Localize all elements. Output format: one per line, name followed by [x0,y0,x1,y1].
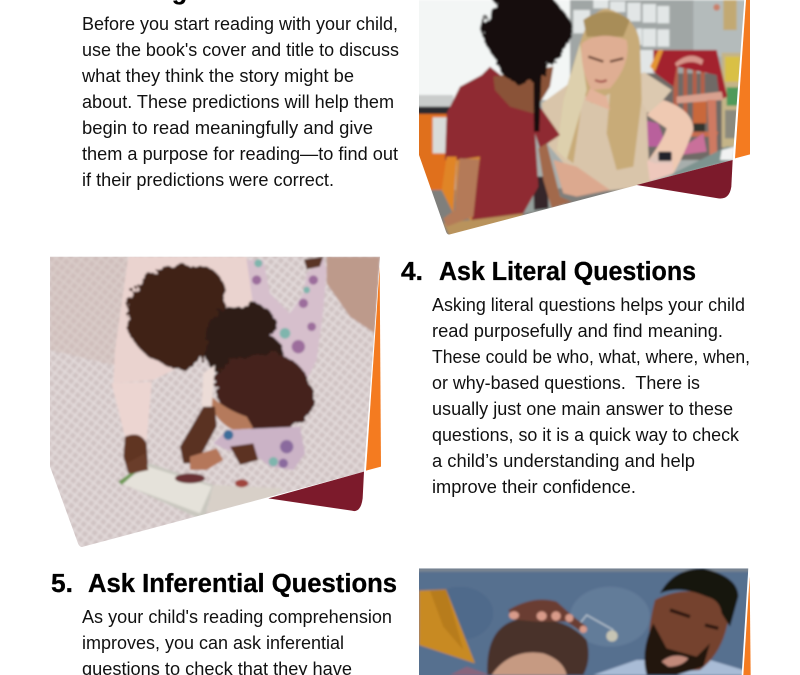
text block: section 4 body: or why-based questions. There is [432,373,700,393]
photo: teacher and child reading at a table [410,0,760,240]
heading: section 5: 5. [51,570,73,598]
photo scene [40,250,390,550]
orange accent strip [735,0,750,158]
text block: section 5 body [82,607,392,675]
child's arms [443,158,479,227]
text block: section 4 body: usually just one main answer to these [432,399,733,419]
text block: section 3 body: if their predictions were correct. [82,170,334,190]
watch [650,152,671,163]
child's hair [483,0,572,132]
kite string and toy [580,615,613,630]
mother's body [113,257,255,383]
photo scene [410,0,760,240]
shelf [722,53,742,148]
woman's face [581,36,628,90]
chair [673,63,705,130]
hands [190,448,223,470]
text block: section 4 body: read purposefully and find meaning. [432,321,723,341]
text block: section 4 body [432,295,750,497]
dark red corner shape [268,472,364,511]
kite [419,589,475,663]
text block: section 3 body: them a purpose for reading—to find out [82,144,398,164]
father's shirt [593,660,743,675]
section 3: make predictions [51,0,760,240]
child's hair [205,303,283,375]
text block: section 3 body: begin to read meaningfully and give [82,118,373,138]
text block: section 3 body: about. These predictions will help them [82,92,394,112]
child's face [493,67,553,113]
woman's shirt [540,73,650,192]
text block: section 3 body: Before you start reading with your child, [82,14,398,34]
dark red corner shape [637,160,733,199]
text block: section 4 body: These could be who, what, where, when, [432,347,750,367]
mother's shoulder top and forearm [180,407,217,463]
text block: section 3 body: use the book's cover and title to discuss [82,40,399,60]
child's shoulder [450,667,490,675]
child's leg, pajamas [247,258,327,380]
pillow [327,257,380,333]
heading: section 4: 4. [401,258,423,286]
child's forehead [492,653,567,675]
text block: section 4 body: questions, so it is a quick way to check [432,425,740,445]
text block: section 5 body: improves, you can ask inferential [82,633,344,653]
text block: section 4 body: Asking literal questions helps your child [432,295,745,315]
photo scene [419,568,748,675]
text block: section 4 body: a child’s understanding and help [432,451,695,471]
mother's hair [127,265,227,370]
child's face [212,397,253,430]
orange accent strip [743,577,751,675]
father's eyes [670,610,718,628]
child's sleeves [213,427,305,470]
woman's hair [566,8,642,170]
father's beard [644,623,710,675]
child's shirt [445,67,560,220]
father's face [649,591,730,673]
father's hand [508,600,587,633]
text block: section 3 body [81,14,399,190]
text block: section 4 body: improve their confidence. [432,477,636,497]
table [431,188,624,234]
woman's arm [647,100,693,182]
mother's hand [123,434,148,473]
section 5: ask inferential questions [51,560,760,675]
heading: section 4: Ask Literal Questions [439,258,696,286]
photo: mother and daughter reading on a bed [40,250,390,550]
orange accent strip [366,267,381,471]
mother's thumb [127,453,148,474]
text block: section 3 body: what they think the story might be [81,66,354,86]
father's hair [660,568,738,627]
heading: section 5: Ask Inferential Questions [88,570,397,598]
section 4: ask literal questions [40,250,750,550]
woman's lower arm [553,160,610,197]
book [136,464,213,516]
photo: father and child with a book [419,568,751,675]
child's hair [487,618,589,675]
text block: section 5 body: As your child's reading comprehension [82,607,392,627]
